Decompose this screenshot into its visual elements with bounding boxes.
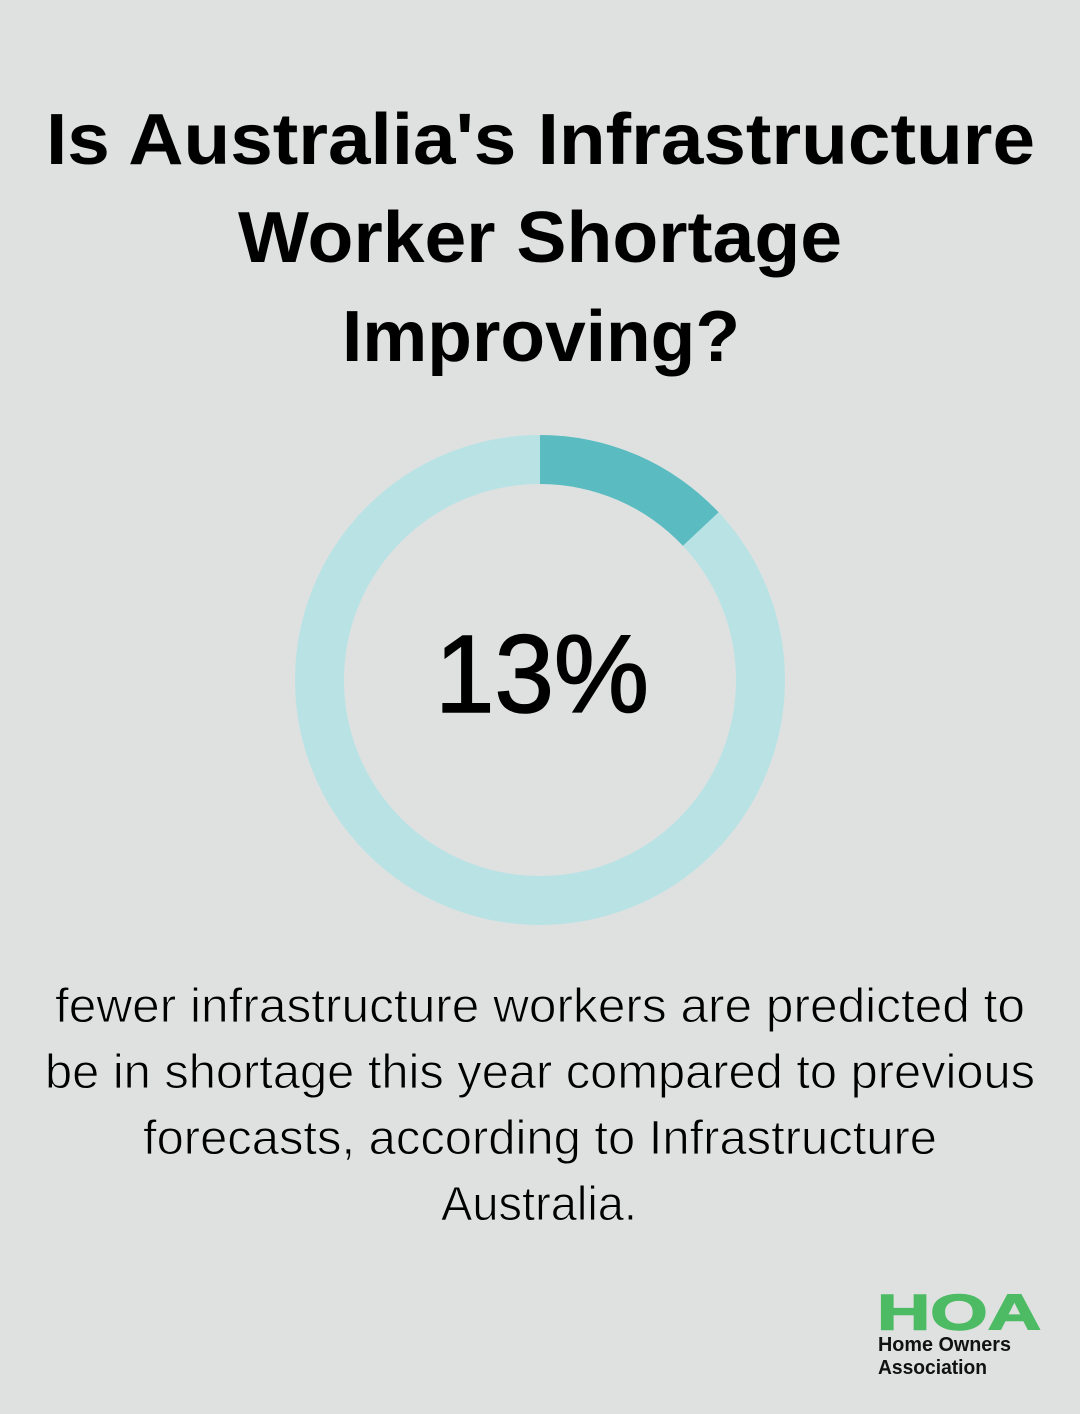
big number: 13% [435, 613, 649, 736]
title [46, 100, 1035, 377]
logo name: Home Owners [878, 1334, 1011, 1356]
description text [45, 980, 1035, 1231]
logo mark: HOA [877, 1284, 1041, 1340]
description text: forecasts, according to Infrastructure [143, 1112, 937, 1165]
title: Worker Shortage [238, 198, 842, 278]
donut track [320, 460, 760, 900]
description text: Australia. [441, 1178, 637, 1231]
description text: be in shortage this year compared to previous [45, 1046, 1035, 1099]
logo: Home Owners Association [877, 1284, 1041, 1379]
logo name: Association [878, 1357, 987, 1379]
description text: fewer infrastructure workers are predicted to [55, 980, 1025, 1033]
title: Improving? [342, 297, 740, 377]
donut chart: 13% [320, 435, 760, 900]
logo name [878, 1334, 1011, 1379]
donut highlighted segment [540, 435, 719, 546]
title: Is Australia's Infrastructure [46, 100, 1035, 180]
